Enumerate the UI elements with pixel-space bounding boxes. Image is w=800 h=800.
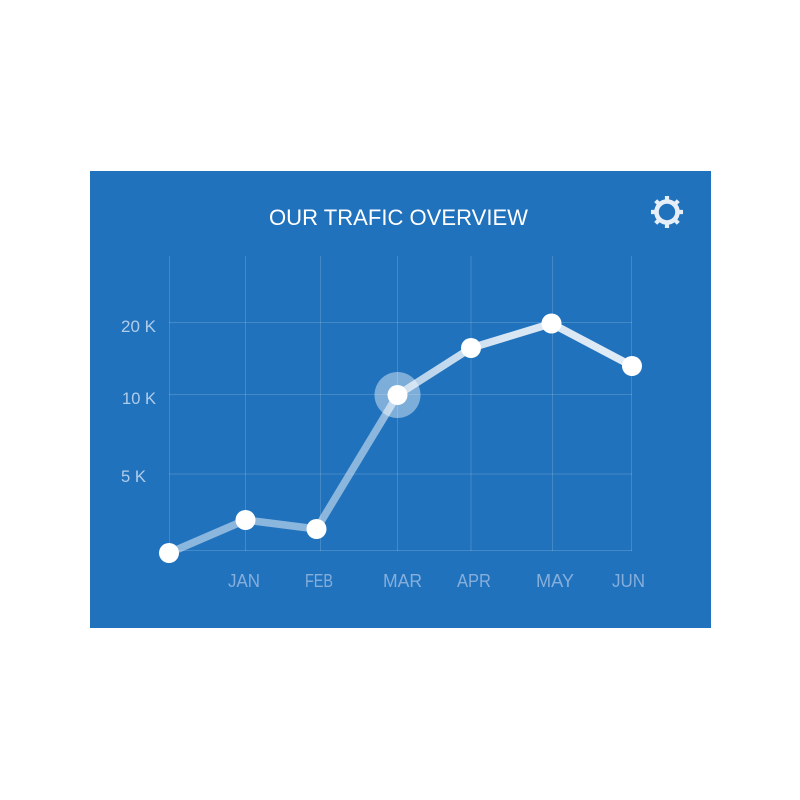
y axis labels: 20 K — [121, 317, 157, 336]
x axis month labels — [228, 571, 645, 591]
x axis month labels: APR — [457, 571, 491, 591]
x axis month labels: JAN — [228, 571, 260, 591]
x axis month labels: MAY — [536, 571, 574, 591]
y axis labels: 10 K — [122, 389, 157, 408]
x axis month labels: MAR — [383, 571, 422, 591]
y axis labels: 5 K — [121, 467, 147, 486]
data points — [159, 314, 642, 563]
x axis month labels: FEB — [305, 571, 333, 591]
icon: settings gear — [651, 196, 683, 228]
panel: chart card — [90, 171, 711, 628]
x axis month labels: JUN — [612, 571, 645, 591]
y axis labels — [121, 317, 157, 486]
highlight halo: March — [374, 372, 420, 418]
title: OUR TRAFIC OVERVIEW — [269, 205, 529, 230]
traffic line — [169, 324, 632, 553]
chart grid — [169, 256, 632, 551]
